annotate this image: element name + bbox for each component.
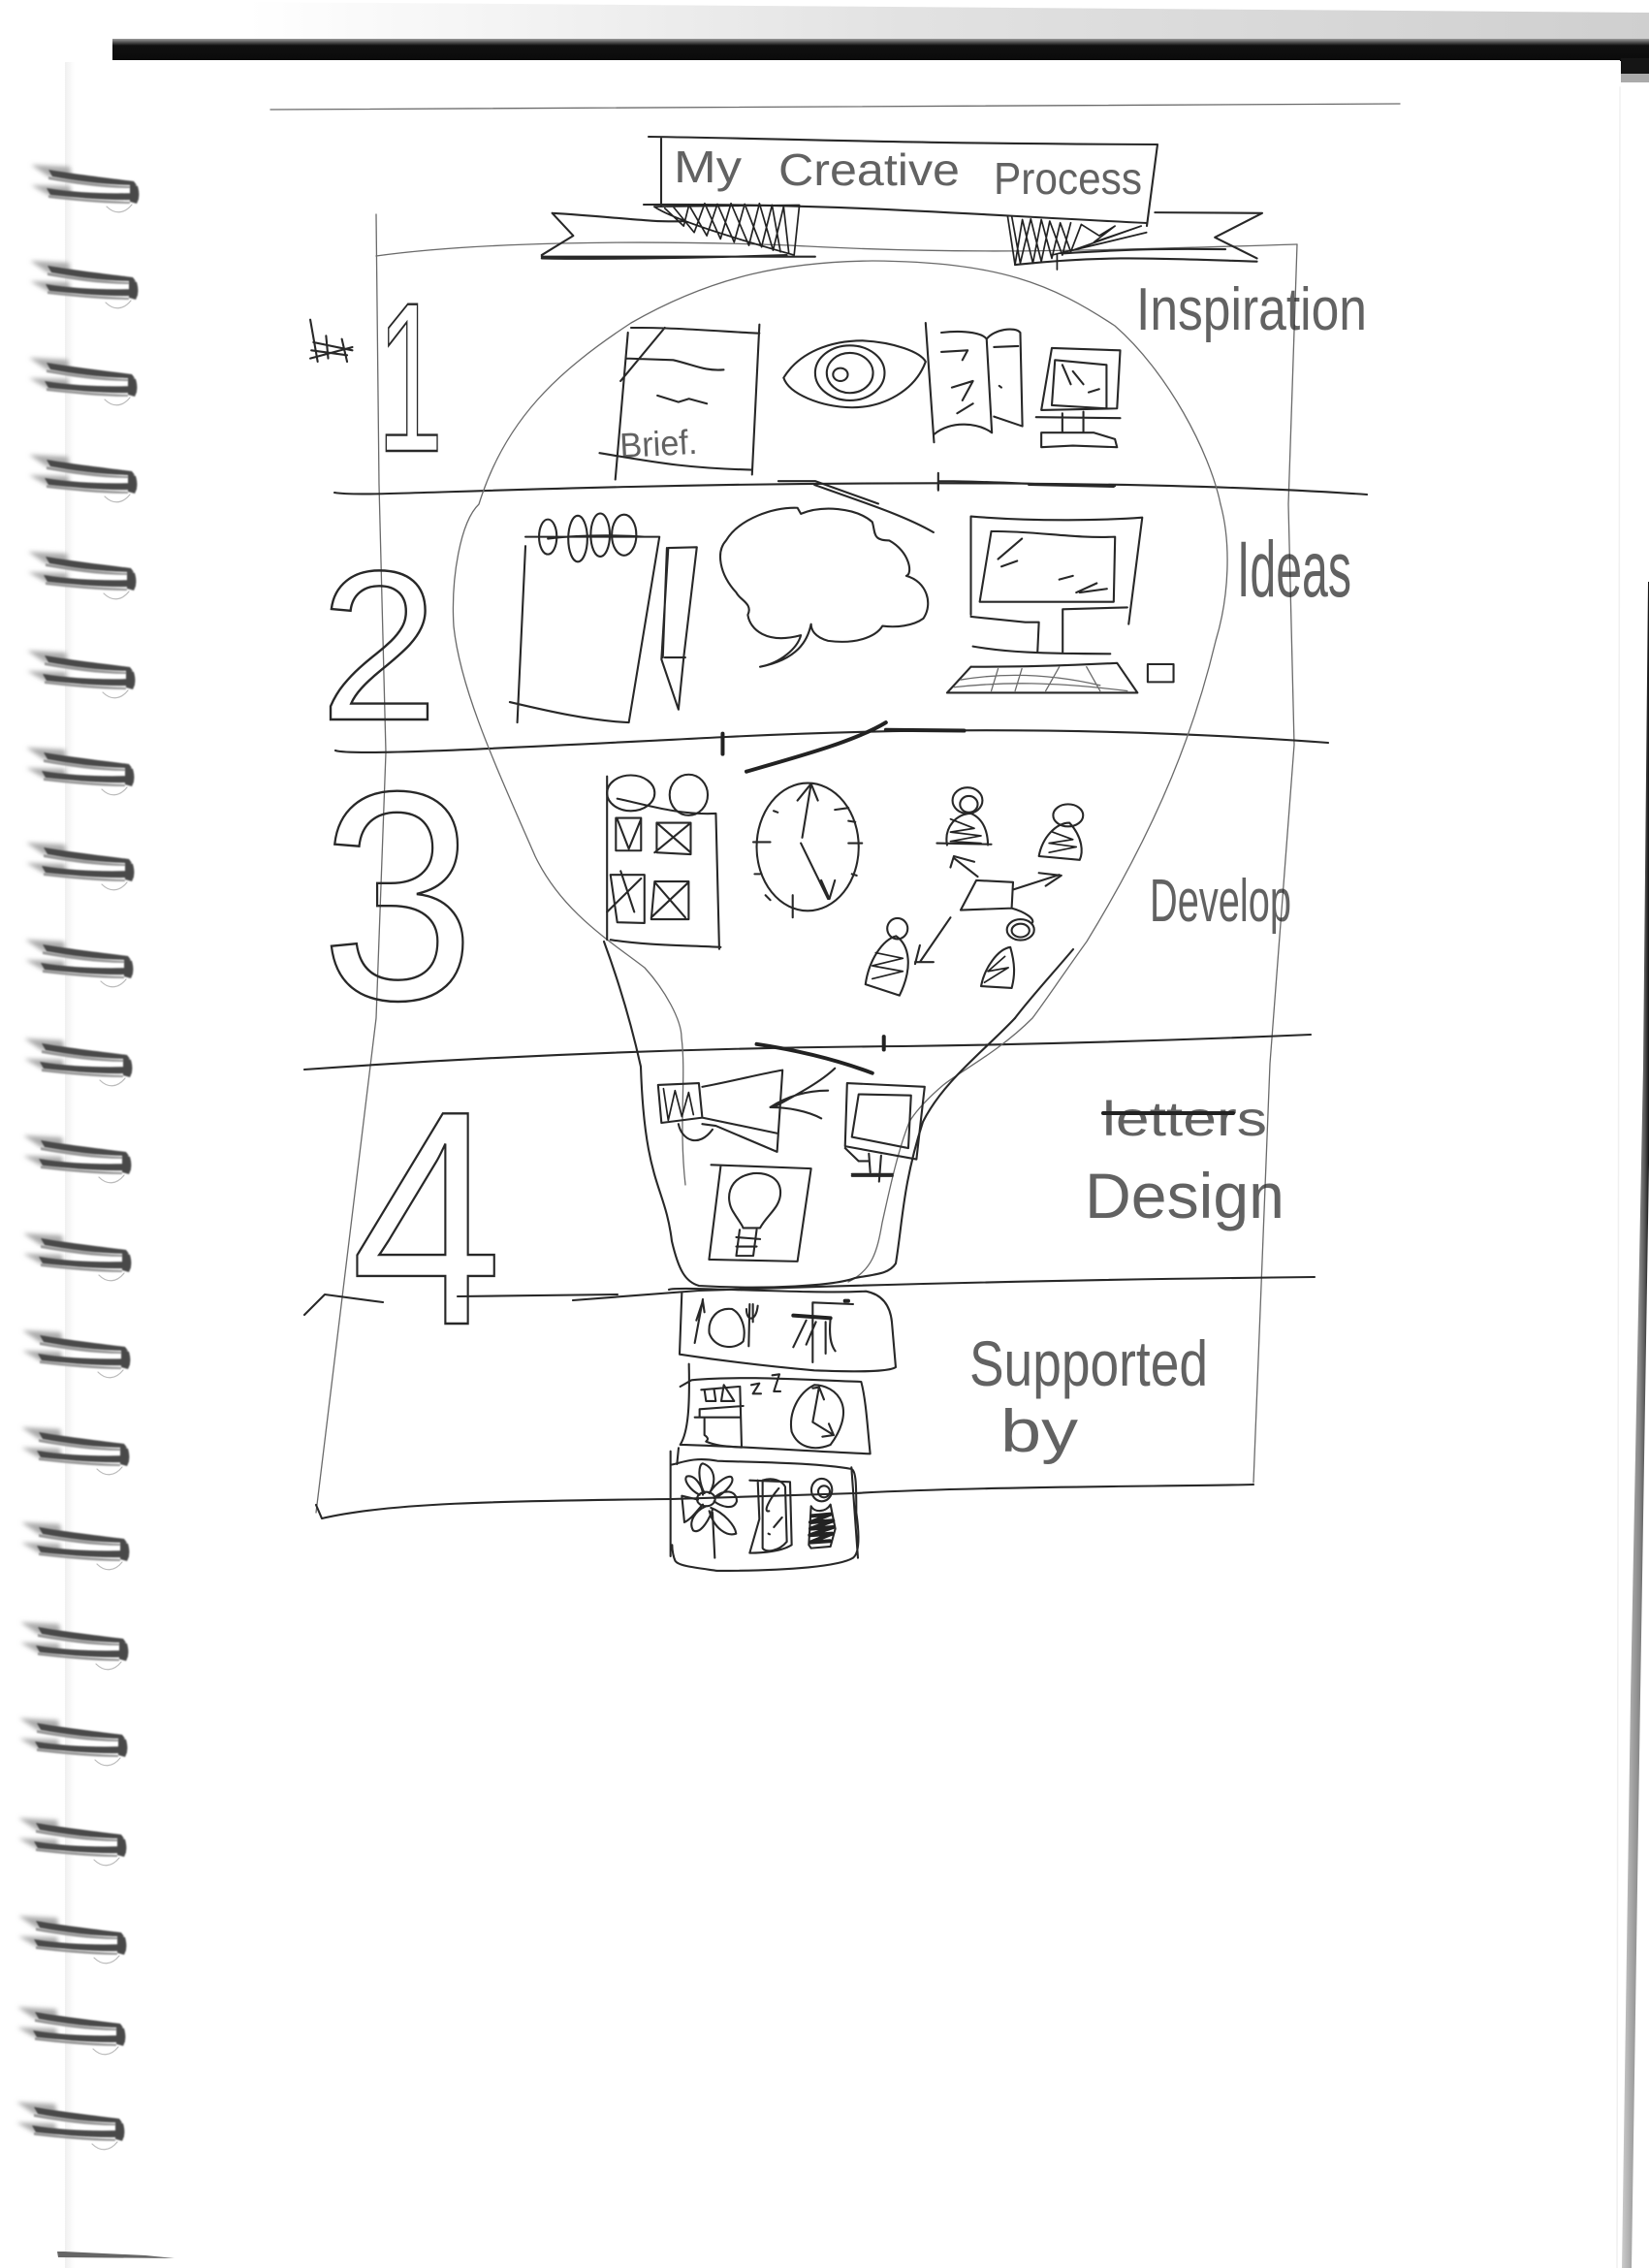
icon: light bulb card [709, 1165, 811, 1262]
sketch frame [316, 214, 1297, 1518]
light bulb outline [453, 261, 1227, 1288]
title text third word: Process [994, 153, 1142, 204]
icon: pencil [661, 547, 697, 710]
icon: clock [753, 783, 862, 917]
divider dashes [814, 485, 1114, 532]
top ruled line [270, 104, 1400, 110]
person bottom left [866, 918, 908, 996]
numeral 1: 1 [377, 258, 443, 496]
label: inspiration: Inspiration [1136, 276, 1367, 343]
title banner [542, 137, 1262, 270]
icon: small monitor [1036, 348, 1121, 447]
icon: monitor [845, 1083, 925, 1182]
icon: desktop computer [947, 517, 1174, 692]
brief label: Brief. [618, 422, 698, 465]
divider pen stroke [722, 722, 964, 772]
left ribbon tail [542, 204, 815, 259]
central square and arrows [915, 856, 1062, 964]
icon: checklist with loops [607, 775, 720, 949]
icon: eye [783, 340, 926, 407]
icon: megaphone [658, 1069, 835, 1152]
title text second word: Creative [778, 144, 960, 195]
icon: team collaboration diagram [866, 787, 1083, 996]
label: supported: Supported [969, 1327, 1208, 1399]
bottom left page mark [57, 2252, 174, 2258]
page right edge [1617, 58, 1649, 2268]
card: food and desk [669, 1289, 896, 1371]
row 3: develop [321, 730, 1291, 1063]
label: ideas: Ideas [1237, 526, 1351, 614]
divider pen stroke [757, 1037, 884, 1073]
supported by section [669, 1289, 1208, 1571]
label: develop: Develop [1150, 868, 1291, 935]
phone [749, 1479, 792, 1553]
title text: My [674, 142, 742, 192]
banner scroll outline [644, 137, 1157, 226]
icon: open book [926, 323, 1023, 442]
page left edge shading [65, 62, 75, 2268]
card: fan and appliances [671, 1448, 858, 1571]
icon: brief sheet [599, 325, 759, 480]
row 2: ideas [320, 485, 1351, 772]
row 1: inspiration [310, 258, 1367, 503]
row divider lines [304, 483, 1367, 1315]
person top right [1039, 804, 1083, 860]
crossed out mark [310, 320, 352, 362]
numeral 2: 2 [320, 527, 438, 765]
scanner top shadow [0, 0, 1649, 44]
right ribbon tail [1007, 212, 1262, 270]
label: crossed out word: letters [1102, 1092, 1267, 1146]
figure with hatched body [809, 1479, 836, 1549]
numeral 3: 3 [321, 730, 475, 1063]
label: design: Design [1085, 1160, 1284, 1231]
spiral binding rings [16, 165, 139, 2150]
person top left [936, 787, 992, 846]
row 4: design [351, 1037, 1284, 1389]
icon: idea thought cloud [720, 508, 928, 667]
card: bed and clock [681, 1364, 871, 1453]
label: by: by [1000, 1398, 1078, 1465]
person bottom right [981, 919, 1034, 988]
fan flower [682, 1463, 737, 1558]
notebook back cover bar [112, 39, 1649, 61]
numeral 4: 4 [351, 1047, 502, 1389]
icon: spiral notepad [510, 513, 659, 722]
divider dashes [778, 473, 1115, 503]
